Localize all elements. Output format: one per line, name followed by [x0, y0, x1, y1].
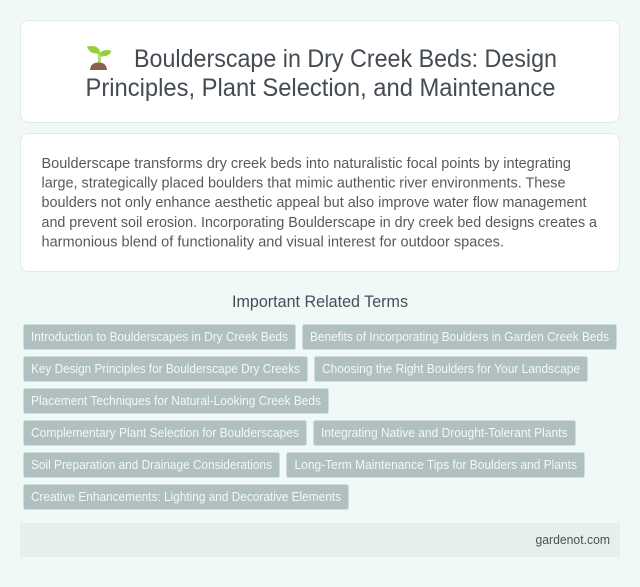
tag: introduction: Introduction to Boulderscapes in Dry Creek Beds — [31, 330, 288, 344]
tag: maintenance tips: Long-Term Maintenance Tips for Boulders and Plants — [294, 458, 577, 472]
tag: benefits: Benefits of Incorporating Boulders in Garden Creek Beds — [310, 330, 609, 344]
tag: introduction — [24, 324, 296, 350]
footer: source text: gardenot.com — [536, 532, 610, 547]
panel: description card — [20, 134, 620, 272]
icon: seedling — [87, 46, 112, 70]
tag: key design principles — [24, 356, 308, 382]
text block: description: large, strategically placed boulders that mimic authentic river environments. These — [42, 176, 566, 192]
panel: related term tags — [24, 324, 616, 510]
tag: placement techniques: Placement Techniques for Natural-Looking Creek Beds — [31, 394, 321, 408]
heading: title: Principles, Plant Selection, and Maintenance — [86, 74, 556, 102]
tag: choosing boulders — [314, 356, 588, 382]
tag: complementary plants — [24, 420, 306, 446]
tag: key design principles: Key Design Principles for Boulderscape Dry Creeks — [31, 362, 300, 376]
text block: description: harmonious blend of functionality and visual interest for outdoor spaces. — [42, 234, 504, 250]
tag: placement techniques — [24, 388, 328, 414]
tag: complementary plants: Complementary Plant Selection for Boulderscapes — [31, 426, 299, 440]
text block: description: boulders not only enhance aesthetic appeal but also improve water flow management — [42, 195, 586, 211]
tag: native plants — [314, 420, 576, 446]
panel: title card — [20, 20, 620, 122]
heading: title: Boulderscape in Dry Creek Beds: Design — [134, 45, 557, 73]
heading: important related terms: Important Related Terms — [232, 293, 408, 311]
text block: description: and prevent soil erosion. Incorporating Boulderscape in dry creek bed designs creates a — [42, 215, 598, 231]
tag: maintenance tips — [286, 452, 584, 478]
heading: title — [86, 45, 557, 102]
tag: soil preparation — [24, 452, 280, 478]
footer — [20, 523, 620, 557]
tag: soil preparation: Soil Preparation and Drainage Considerations — [31, 458, 272, 472]
tag: creative enhancements: Creative Enhancements: Lighting and Decorative Elements — [31, 490, 341, 504]
tag: creative enhancements — [24, 484, 348, 510]
tag: benefits — [302, 324, 616, 350]
tag: native plants: Integrating Native and Drought-Tolerant Plants — [321, 426, 568, 440]
text block: description: Boulderscape transforms dry creek beds into naturalistic focal points by integrating — [42, 156, 571, 172]
text block: description — [42, 156, 598, 250]
tag: choosing boulders: Choosing the Right Boulders for Your Landscape — [322, 362, 580, 376]
